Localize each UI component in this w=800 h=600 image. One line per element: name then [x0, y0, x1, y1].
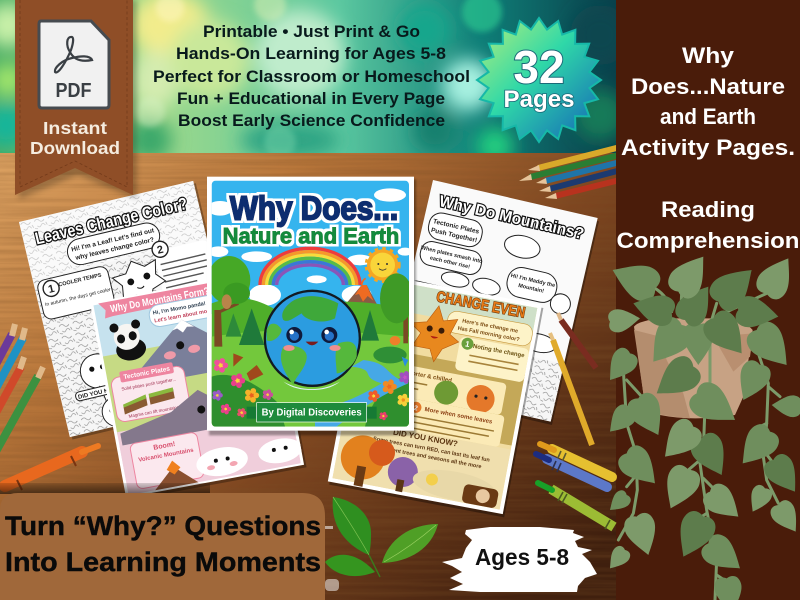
- tectonic plates card: Tectonic Plates: [123, 366, 171, 381]
- stitching: [20, 0, 127, 187]
- panda character: [110, 320, 146, 360]
- worksheet: leaves change color (black and white): [19, 180, 207, 440]
- right panel heading: Activity Pages.: [621, 135, 795, 160]
- right brown panel: [616, 0, 800, 600]
- scribbled lower scene: [522, 357, 562, 422]
- pdf file icon: [39, 21, 109, 108]
- caption panel: turn why questions into learning moments: Into Learning Moments: [5, 547, 321, 577]
- worksheet: why do mountains (black and white): [414, 180, 599, 425]
- hanging plant in pot: [600, 247, 800, 600]
- step one card: [455, 336, 530, 383]
- crayons right: [536, 444, 614, 529]
- step one card: Noting the change: [472, 344, 526, 359]
- green leaves decoration: [325, 497, 438, 577]
- speech bubbles: [414, 212, 558, 303]
- right panel heading: and Earth: [660, 104, 756, 129]
- third section with squirrel: More when some leaves: [424, 407, 493, 426]
- instant download label: [30, 118, 120, 158]
- did you know strip: Different trees and seasons all the more: [378, 445, 482, 470]
- butterflies: [233, 353, 263, 381]
- speech bubble: why leaves change color?: [74, 237, 155, 262]
- cover title: Nature and Earth: [223, 223, 399, 248]
- middle section: [414, 366, 506, 414]
- outlined mountains: [523, 415, 524, 416]
- step one card: [36, 265, 115, 321]
- stems: [618, 288, 780, 600]
- speech bubble: [148, 295, 207, 327]
- top banner: green bokeh background: [0, 0, 630, 164]
- pink title ribbon: Why Do Mountains Form?: [109, 285, 210, 315]
- green landscape: [212, 298, 409, 427]
- squirrel and bunny drawings: [75, 353, 113, 426]
- speech bubble: Let's learn about mountains!: [154, 305, 229, 325]
- river: [315, 360, 408, 427]
- ages label: Ages 5-8: [475, 544, 569, 570]
- cover title: Why Does...: [230, 190, 398, 227]
- caption panel: turn why questions into learning moments: Turn “Why?” Questions: [5, 511, 321, 541]
- step one card: In autumn, the days get cooler: [45, 287, 112, 308]
- second mountain: [120, 390, 207, 446]
- book cover: why does nature and earth: [207, 177, 416, 435]
- instant download label: Instant: [43, 118, 107, 138]
- step one card: 1: [47, 283, 56, 296]
- speech bubble: [66, 222, 160, 266]
- speech bubble: Hi, I'm Momo panda!: [152, 301, 206, 317]
- author banner: By Digital Discoveries: [262, 408, 362, 419]
- wood table background: [0, 153, 616, 600]
- leaf character: [414, 305, 460, 362]
- speech bubble: Here's the change me: [462, 318, 518, 335]
- speech bubbles: When plates smash into: [420, 245, 484, 265]
- leaves: [600, 247, 800, 600]
- volcanic mountains card: [129, 432, 205, 493]
- sun: [367, 249, 398, 281]
- mountain with face: [142, 320, 207, 377]
- speech bubbles: Push Together!: [430, 227, 478, 244]
- shadow band above caption: [0, 483, 210, 494]
- worksheet: why do mountains form (colour): [90, 270, 307, 501]
- feature list: Printable • Just Print & Go: [203, 22, 420, 41]
- feature list: Hands-On Learning for Ages 5-8: [176, 44, 446, 63]
- starburst badge: 32 pages: 32: [513, 41, 565, 93]
- right panel heading: Reading: [661, 197, 755, 222]
- right panel heading: Why: [682, 43, 735, 68]
- right panel heading: Does...Nature: [631, 74, 785, 99]
- orange title: CHANGE EVEN: [435, 288, 527, 322]
- rainbow: [260, 248, 360, 285]
- tectonic plates card: [109, 360, 191, 423]
- worksheet heading: Why Do Mountains?: [437, 193, 585, 243]
- did you know strip: DID YOU KNOW?: [392, 428, 459, 449]
- cover title: [223, 190, 399, 248]
- tectonic plates card: Solid plates push together...: [121, 377, 177, 392]
- feature list: Boost Early Science Confidence: [178, 111, 445, 130]
- author banner: [247, 403, 377, 422]
- instant download label: Download: [30, 138, 120, 158]
- speech bubble: Hi! I'm a Leaf! Let's find out: [71, 227, 156, 254]
- smiling clouds: [196, 438, 302, 476]
- smiling earth: [264, 290, 361, 390]
- feature list: Perfect for Classroom or Homeschool: [153, 67, 470, 86]
- orange crayon: [5, 446, 98, 490]
- outlined clouds and sun: [440, 234, 571, 354]
- white brush patch: [325, 526, 597, 592]
- autumn trees: [340, 435, 498, 508]
- step two card: [151, 240, 207, 290]
- starburst badge: 32 pages: Pages: [504, 86, 574, 113]
- leaf character: [111, 258, 166, 297]
- step one card: COOLER TEMPS: [58, 272, 103, 288]
- right panel heading: [616, 43, 800, 253]
- right panel heading: Comprehension: [616, 228, 800, 253]
- squirrel and bunny drawings: DID YOU KNOW: [78, 385, 124, 401]
- earth eyes and smile: [283, 327, 341, 351]
- step two card: 2: [156, 244, 165, 257]
- did you know strip: [332, 430, 511, 510]
- speech bubbles: Hi! I'm Maddy the: [510, 273, 556, 289]
- trees: [208, 256, 413, 363]
- pencils right of worksheet: [550, 313, 596, 445]
- feature list: Fun + Educational in Every Page: [177, 89, 445, 108]
- third section with squirrel: [412, 399, 504, 446]
- volcanic mountains card: Boom!: [153, 441, 176, 452]
- speech bubbles: Mountain!: [518, 283, 545, 295]
- pdf file icon: PDF: [56, 80, 92, 102]
- speech bubbles: each other rise!: [429, 255, 471, 270]
- speech bubble: [445, 310, 534, 347]
- third section with squirrel: 2: [413, 405, 418, 413]
- worksheet heading: Leaves Change Color?: [33, 194, 189, 248]
- step one card: 1: [464, 339, 471, 349]
- leather ribbon with pdf icon: [15, 0, 137, 199]
- starburst badge: 32 pages: [477, 18, 601, 142]
- feature list: [153, 22, 470, 130]
- pencils top right: [519, 145, 616, 199]
- pot: [634, 318, 753, 418]
- volcano: [348, 278, 377, 304]
- speech bubbles: Tectonic Plates: [432, 218, 480, 236]
- volcanic mountains card: Volcanic Mountains: [138, 448, 195, 464]
- worksheet: change event (autumn colour): [327, 272, 544, 517]
- pink title ribbon: [98, 283, 207, 318]
- tectonic plates card: Magma can lift mountains: [128, 404, 180, 419]
- middle section: So the days get shorter & chilled: [359, 361, 453, 384]
- did you know strip: Some trees can turn RED, can last its leaf fun: [373, 436, 491, 464]
- caption panel: turn why questions into learning moments: [0, 493, 325, 600]
- speech bubble: Has Fall morning color?: [457, 326, 521, 343]
- flowers: [214, 361, 409, 419]
- pencils left: [0, 324, 43, 455]
- speech bubbles: Fold Mountains: [409, 284, 457, 301]
- clouds: [207, 188, 412, 306]
